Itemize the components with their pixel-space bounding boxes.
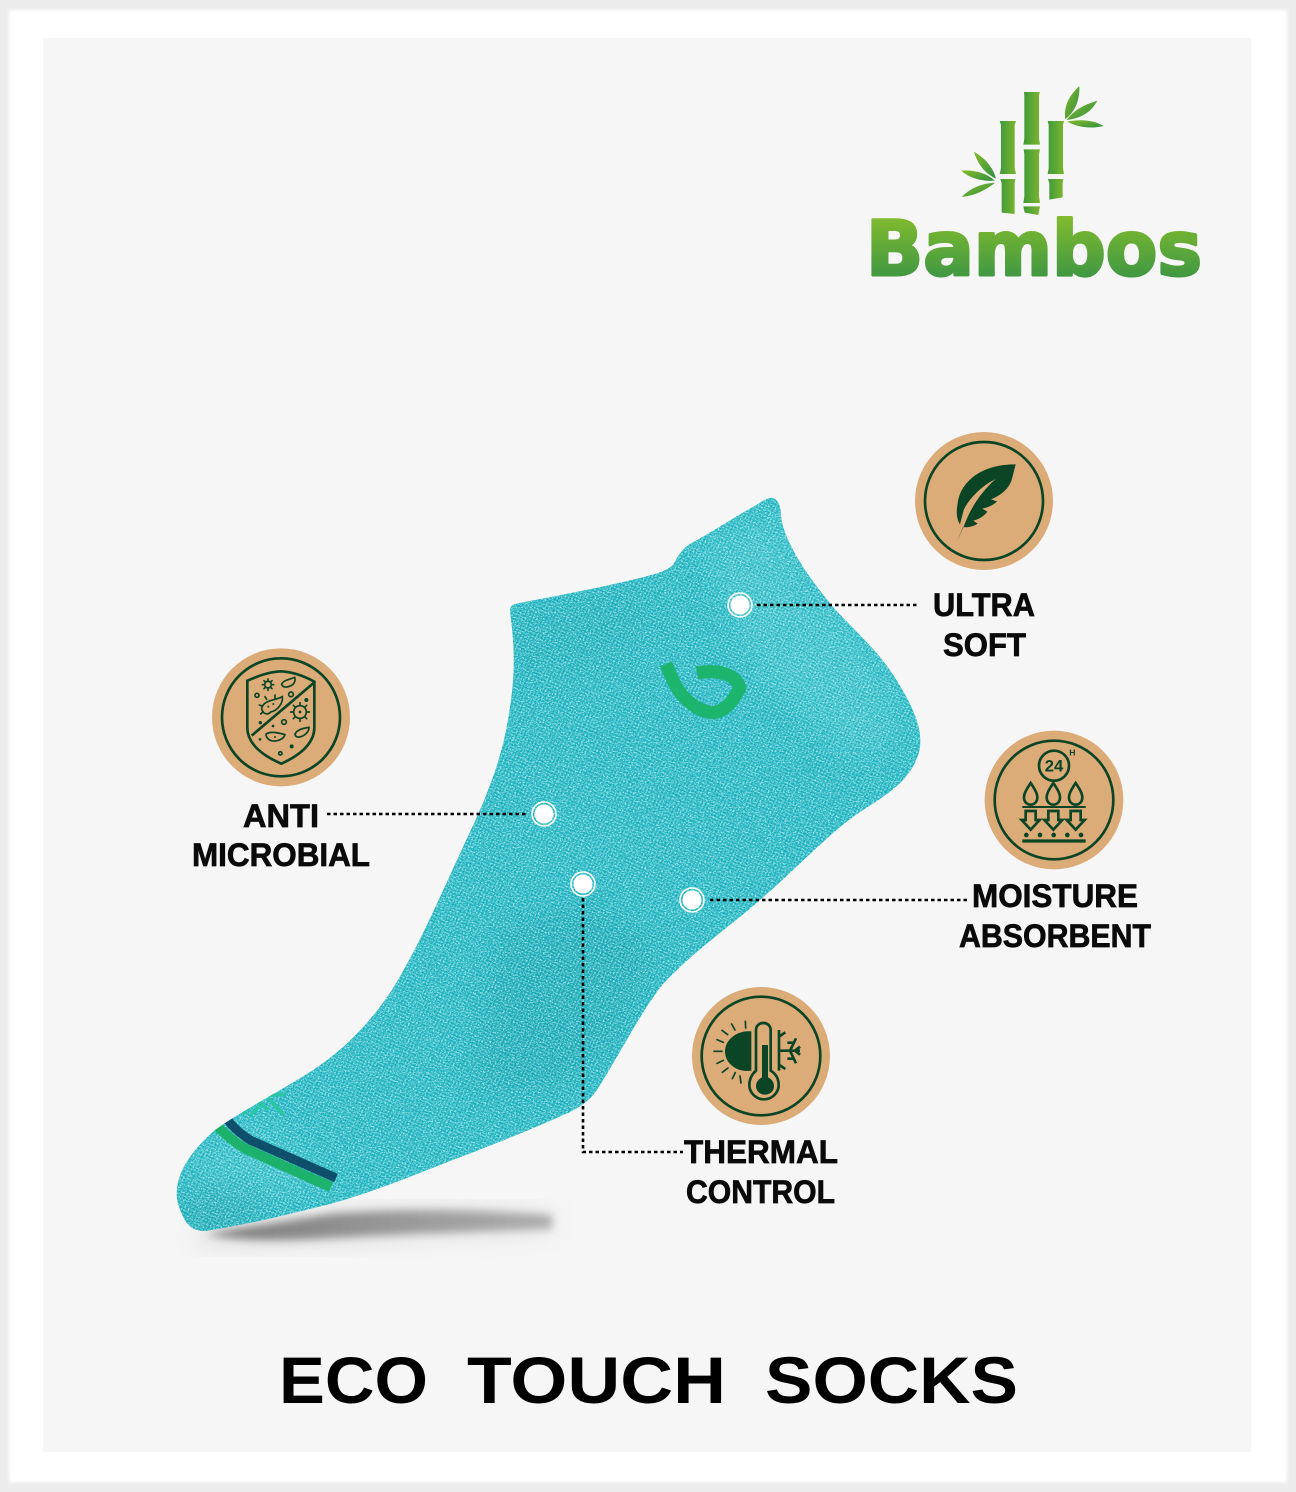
icon: shield with microbes: [212, 648, 350, 786]
leader line: [710, 899, 970, 901]
leader line: [583, 898, 683, 1152]
callout: moisture absorbent: [680, 731, 1151, 954]
icon: moisture layers: [985, 731, 1123, 869]
label: [684, 1134, 838, 1210]
sock logo mark: [666, 664, 740, 712]
title: [279, 1343, 1018, 1417]
leader line: [757, 604, 918, 606]
icon: sun thermometer snowflake: [692, 987, 830, 1125]
label: [192, 798, 370, 873]
label: ULTRA: [933, 587, 1035, 623]
callout: anti microbial: [192, 648, 556, 873]
wordmark: Bambos: [866, 204, 1202, 293]
marker: [571, 872, 595, 896]
icon: moisture layers: H: [1069, 748, 1075, 758]
label: MICROBIAL: [192, 837, 370, 873]
label: ANTI: [243, 798, 319, 834]
label: THERMAL: [684, 1134, 838, 1170]
icon: moisture layers: 24: [1045, 757, 1064, 776]
sock illustration: [170, 490, 930, 1246]
label: CONTROL: [686, 1174, 835, 1210]
label: [933, 587, 1035, 663]
marker: [728, 593, 752, 617]
leader line: [327, 813, 528, 815]
title: TOUCH: [467, 1343, 726, 1417]
label: ABSORBENT: [959, 918, 1151, 954]
toe marking: [243, 1094, 285, 1116]
label: [959, 878, 1151, 954]
callout: thermal control: [571, 872, 838, 1210]
label: MOISTURE: [972, 878, 1138, 914]
sock body: [170, 490, 930, 1240]
callout: ultra soft: [728, 432, 1053, 663]
brand logo: Bambos: [866, 86, 1202, 293]
toe stripes: [218, 1118, 336, 1187]
icon: feather: [915, 432, 1053, 570]
label: SOFT: [943, 627, 1026, 663]
marker: [680, 888, 704, 912]
icon: bamboo stalks: [961, 86, 1104, 215]
title: SOCKS: [765, 1343, 1018, 1417]
title: ECO: [279, 1343, 428, 1417]
marker: [532, 802, 556, 826]
sock shadow: [195, 1210, 555, 1246]
